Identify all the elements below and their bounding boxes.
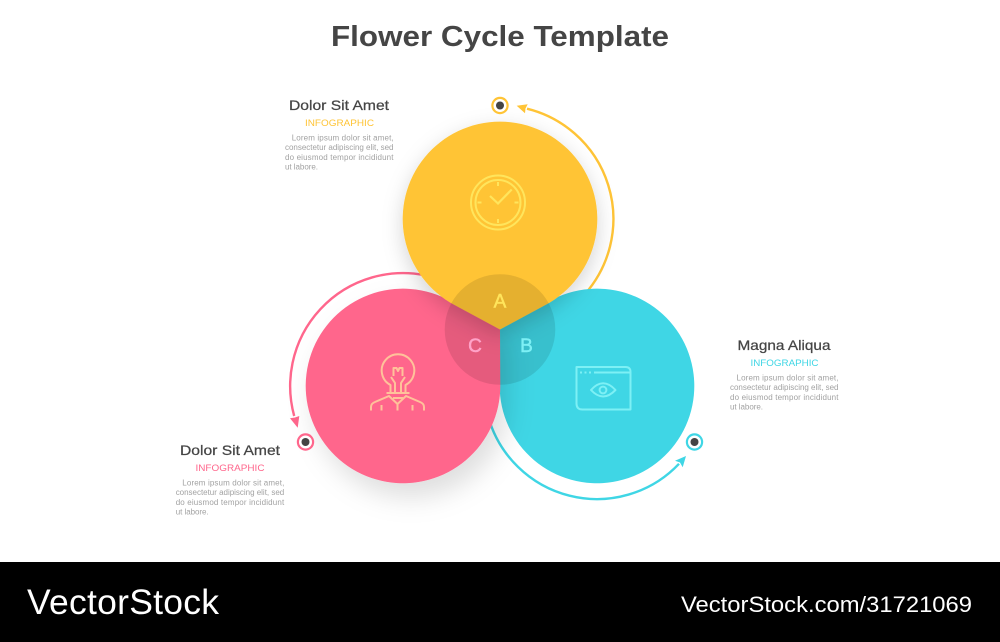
text block: yellow: ut labore. [285,162,318,172]
text block: yellow [285,97,394,172]
text block: blue: consectetur adipiscing elit, sed [730,383,838,392]
arrow: yellow arc [517,104,613,294]
text block: blue: do eiusmod tempor incididunt [730,393,839,402]
arrow: pink arc [290,273,425,428]
marker: pink [298,434,313,450]
letter A: A [494,292,507,313]
footer logo: VectorStock [27,582,219,622]
text block: blue [730,337,839,412]
footer bar [0,562,1000,642]
icon: clock [471,176,525,230]
text block: pink: Dolor Sit Amet [180,442,280,458]
text block: pink [176,442,285,516]
marker: yellow [492,98,508,113]
petal: yellow [403,122,597,330]
text block: yellow: Lorem ipsum dolor sit amet, [292,134,394,142]
text block: pink: consectetur adipiscing elit, sed [176,488,284,497]
arrow: blue arc [488,416,686,499]
text block: yellow: consectetur adipiscing elit, sed [285,143,394,152]
text block: yellow: Dolor Sit Amet [289,97,389,113]
petal: pink [306,289,500,483]
letter B: B [520,336,533,357]
text block: blue: ut labore. [730,402,763,412]
text block: blue: INFOGRAPHIC [750,358,819,369]
footer url: VectorStock.com/31721069 [681,592,972,617]
text block: pink: INFOGRAPHIC [196,463,265,474]
text block: yellow: do eiusmod tempor incididunt [285,153,394,162]
centre overlay circle [445,274,555,385]
marker: blue [687,434,702,450]
icon: light bulb head [371,354,424,410]
text block: pink: ut labore. [176,508,209,516]
text block: yellow: INFOGRAPHIC [305,118,374,129]
letter C: C [468,336,482,357]
icon: browser window with eye [576,367,630,410]
text block: pink: Lorem ipsum dolor sit amet, [182,478,284,488]
text block: pink: do eiusmod tempor incididunt [176,498,285,507]
title: Flower Cycle Template [331,21,669,53]
petal: blue [500,289,694,483]
text block: blue: Lorem ipsum dolor sit amet, [736,374,838,382]
text block: blue: Magna Aliqua [738,337,831,353]
